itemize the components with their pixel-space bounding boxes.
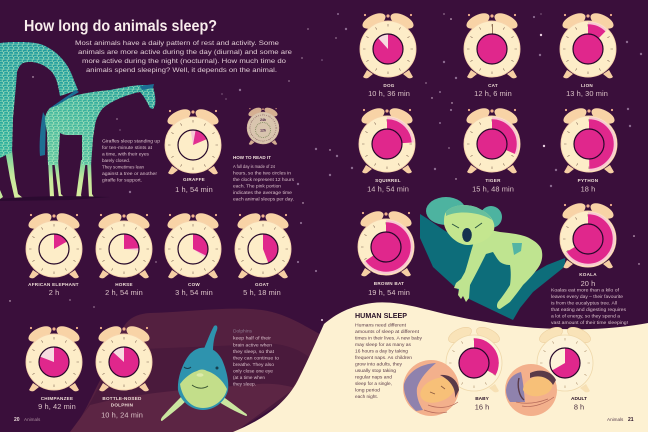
night sky stars: [9, 13, 642, 321]
clock: cat: 12 h, 6 min: [474, 89, 512, 98]
clock: adult: [537, 324, 593, 412]
clock: cat: [464, 10, 520, 98]
human sleep text: sleep for a single,: [355, 381, 392, 386]
clock: goat: GOAT: [255, 282, 269, 287]
clock: tiger: 15 h, 48 min: [472, 184, 514, 194]
small giraffe: [40, 84, 155, 198]
clock: horse: 2 h, 54 min: [105, 288, 143, 297]
dolphin text: they sleep, so that: [233, 349, 275, 354]
how to read it: [233, 106, 295, 202]
chest patch: [512, 243, 522, 255]
clock: brown bat: BROWN BAT: [374, 281, 404, 286]
hills behind the dolphin: [70, 309, 322, 432]
clock: tiger: [464, 105, 520, 194]
clock: giraffe: [165, 106, 221, 194]
clock: chimpanzee: [26, 323, 82, 411]
clock: goat: 5 h, 18 min: [243, 288, 281, 297]
how to read it: each. The pink portion: [233, 184, 282, 188]
intro text: Most animals have a daily pattern of rest and activity. Some: [75, 40, 279, 47]
clock: lion: [560, 10, 616, 98]
koala text: a lot of energy, so they spend a: [551, 314, 621, 318]
clock: chimpanzee: 9 h, 42 min: [38, 402, 76, 411]
how to read it: A full day is made of 24: [233, 164, 276, 169]
how to read it: the clock represent 12 hours: [233, 177, 295, 182]
clock: african elephant: [26, 210, 82, 297]
small key clock: 12h: [260, 128, 266, 132]
giraffe text: against a tree or another: [102, 171, 158, 176]
clock: bottle-nosed dolphin: [96, 323, 152, 420]
clock: bottle-nosed dolphin: BOTTLE-NOSED: [102, 396, 142, 401]
clock: koala: 20 h: [581, 279, 595, 288]
human sleep text: grow into adults, they: [355, 362, 403, 366]
dolphin text: brain active when: [233, 342, 273, 348]
human sleep text: long period: [355, 388, 381, 392]
clock: tiger: TIGER: [485, 178, 501, 183]
clock: goat: [235, 210, 291, 297]
clock: brown bat: 19 h, 54 min: [368, 288, 410, 297]
big giraffe: [0, 42, 78, 200]
ears: [426, 197, 466, 225]
clock: squirrel: 14 h, 54 min: [367, 184, 409, 194]
koala text: [551, 288, 628, 325]
koala text: vast amount of their time sleeping!: [551, 320, 628, 325]
small key clock: [247, 106, 279, 145]
clock: koala: [560, 200, 616, 288]
illustration: dolphin: [161, 325, 247, 421]
human sleep text: [355, 322, 423, 399]
clock: bottle-nosed dolphin: 10 h, 24 min: [101, 410, 143, 420]
human sleep text: frequent naps. As children: [355, 355, 413, 360]
human sleep text: regular naps and: [355, 374, 393, 380]
koala text: leaves every day – their favourite: [551, 294, 624, 299]
clock: dog: DOG: [383, 83, 395, 88]
page number: right: Animals: [607, 417, 624, 422]
intro text: animals are more active during the day (diurnal) and some are: [78, 49, 292, 56]
clock: baby: [446, 324, 502, 412]
clock: adult: 8 h: [574, 402, 584, 412]
clock: giraffe: GIRAFFE: [183, 177, 205, 182]
human sleep text: Humans need different: [355, 322, 407, 328]
how to read it: hours, so the two circles in: [233, 170, 292, 176]
right fin: [216, 394, 247, 416]
clock: python: 18 h: [581, 184, 595, 194]
clock: cow: [165, 210, 221, 297]
branch: [420, 214, 565, 320]
clock: dog: [360, 10, 416, 98]
clock: cat: CAT: [488, 83, 498, 88]
dolphin text: keep half of their: [233, 336, 272, 340]
giraffe text: giraffe for support.: [102, 178, 142, 182]
human sleep heading: HUMAN SLEEP: [355, 311, 407, 320]
intro text: more active during the night (nocturnal). How much time do: [82, 58, 286, 65]
nose: [462, 228, 472, 242]
human sleep text: 16 hours a day by taking: [355, 348, 409, 354]
body and limbs: [454, 228, 542, 309]
head: [444, 205, 494, 245]
page number: left: 20: [14, 417, 20, 423]
clock: horse: HORSE: [115, 282, 133, 287]
cream panel: human sleep background: [233, 302, 648, 432]
human sleep text: amounts of sleep at different: [355, 329, 420, 334]
dolphin text: [233, 328, 280, 386]
giraffe text: [102, 138, 161, 182]
clock: african elephant: AFRICAN ELEPHANT: [28, 282, 79, 287]
giraffe text: for ten-minute stints at: [102, 145, 153, 150]
small key clock: 24h: [260, 118, 266, 122]
human sleep text: each night.: [355, 394, 378, 399]
giraffe text: They sometimes lean: [102, 164, 145, 170]
clock: squirrel: SQUIRREL: [375, 178, 401, 183]
koala text: that eating and digesting requires: [551, 307, 627, 312]
clock: brown bat: [358, 208, 414, 297]
clock: adult: ADULT: [571, 396, 587, 402]
page number: left: [14, 417, 41, 423]
giraffe text: Giraffes sleep standing up: [102, 138, 161, 144]
human sleep text: may sleep for as many as: [355, 342, 412, 347]
ground shadow: [0, 196, 110, 201]
koala text: Koalas eat more than a kilo of: [551, 288, 620, 292]
clock: dog: 10 h, 36 min: [368, 89, 410, 98]
illustration: sleeping adult: [505, 364, 557, 416]
clock: koala: KOALA: [579, 272, 597, 277]
page number: right: 21: [628, 417, 634, 423]
how to read it: indicates the average time: [233, 190, 293, 195]
dolphin text: they sleep.: [233, 382, 256, 386]
closed eyes: [452, 223, 482, 228]
intro text: animals spend sleeping? Well, it depends on the animal.: [86, 67, 277, 74]
koala text: is from the eucalyptus tree. All: [551, 300, 617, 306]
dolphin text: (at a time when: [233, 375, 266, 380]
page number: left: Animals: [24, 417, 41, 422]
how to read it: each animal sleeps per day.: [233, 196, 294, 202]
page number: right: [607, 417, 634, 423]
clock: lion: LION: [581, 83, 593, 88]
dolphin text: only close one eye: [233, 368, 274, 374]
dolphin text: they can continue to: [233, 356, 280, 360]
clock: lion: 13 h, 30 min: [566, 89, 608, 98]
left fin: [161, 394, 188, 421]
clock: cow: COW: [188, 282, 200, 287]
clock: chimpanzee: CHIMPANZEE: [41, 396, 73, 401]
clock: baby: BABY: [475, 396, 490, 402]
giraffe text: barely closed.: [102, 158, 130, 163]
clock: python: [561, 105, 617, 194]
illustration: koala on branch: [420, 197, 565, 320]
belly: [180, 370, 227, 408]
clock: african elephant: 2 h: [49, 288, 59, 297]
clock: baby: 16 h: [475, 402, 489, 412]
intro text: [75, 40, 292, 74]
clock: python: PYTHON: [578, 178, 599, 183]
human sleep text: usually stop taking: [355, 368, 397, 373]
illustration: two giraffes: [0, 42, 155, 201]
clock: horse: [96, 210, 152, 297]
human sleep text: times in their lives. A new baby: [355, 336, 423, 340]
tail: [203, 325, 217, 352]
giraffe text: a time, with their eyes: [102, 152, 150, 156]
title: How long do animals sleep?: [24, 18, 217, 35]
how to read it: HOW TO READ IT: [233, 155, 271, 160]
clock: cow: 3 h, 54 min: [175, 288, 213, 297]
clock: giraffe: 1 h, 54 min: [175, 185, 213, 194]
clock: bottle-nosed dolphin: DOLPHIN: [111, 402, 134, 408]
dolphin text: Dolphins: [233, 328, 253, 334]
illustration: sleeping baby: [403, 360, 459, 416]
dolphin text: breathe. They also: [233, 362, 275, 367]
clock: squirrel: [359, 105, 415, 194]
head: [178, 348, 228, 410]
